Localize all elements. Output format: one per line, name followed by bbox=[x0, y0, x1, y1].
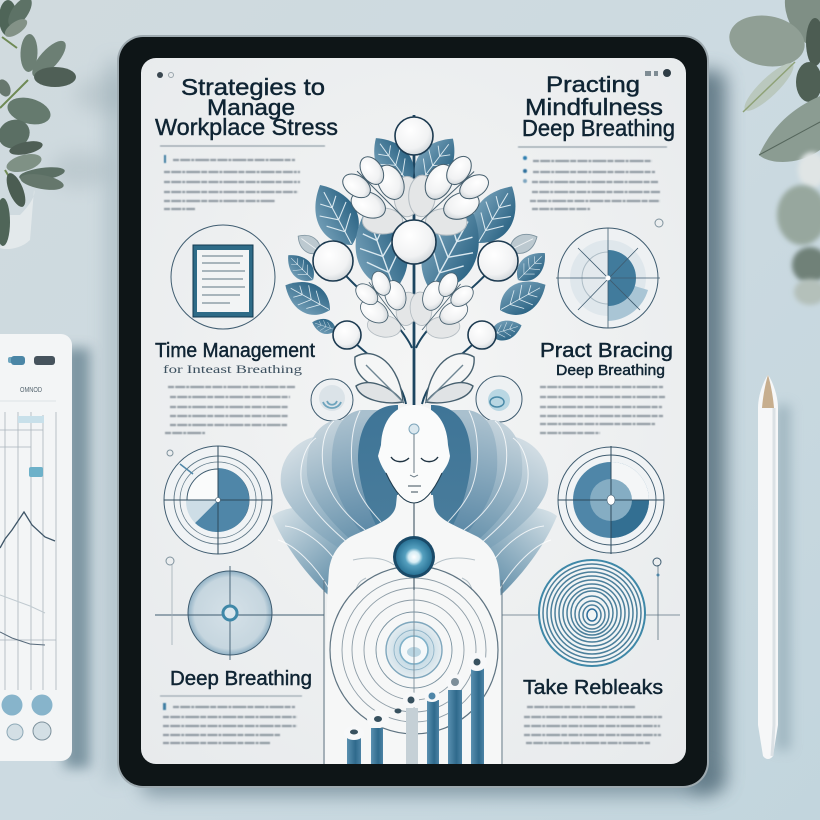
figure: body bbox=[324, 495, 503, 764]
branches bbox=[333, 115, 498, 405]
heading: time management bbox=[155, 340, 315, 376]
text block: mindfulness bbox=[518, 147, 667, 209]
figure: concentric rings bbox=[330, 566, 498, 734]
title: strategies: Manage bbox=[207, 95, 295, 120]
chart: time pie bbox=[164, 446, 272, 554]
heading: time management: for Inteast Breathing bbox=[163, 362, 302, 376]
icon: small circle left bbox=[311, 379, 353, 421]
title: mindfulness: Practing bbox=[546, 72, 640, 97]
status icons bbox=[157, 69, 671, 78]
stylus bbox=[758, 375, 790, 759]
title: strategies: Strategies to bbox=[181, 74, 325, 100]
heading: pract bracing bbox=[540, 340, 673, 379]
small side marks bbox=[166, 219, 663, 576]
tree illustration bbox=[278, 115, 553, 405]
top center caption bbox=[387, 87, 445, 89]
title: mindfulness: Deep Breathing bbox=[522, 115, 675, 141]
heading: take rebleaks: Take Rebleaks bbox=[523, 677, 663, 699]
spheres bbox=[313, 117, 518, 349]
heading: time management: Time Management bbox=[155, 340, 315, 362]
title: mindfulness: Mindfulness bbox=[525, 94, 663, 120]
plant: top left leaves bbox=[0, 0, 135, 249]
blue leaves bbox=[278, 128, 553, 344]
hair waves: left bbox=[272, 405, 398, 610]
side tablet with chart: OMNOD bbox=[20, 387, 42, 394]
heading: pract bracing: Deep Breathing bbox=[556, 362, 665, 379]
text block: pract bracing bbox=[540, 387, 665, 433]
icon: small circle right bbox=[476, 376, 522, 422]
text block: deep breathing bbox=[160, 696, 302, 743]
white leaves bbox=[323, 136, 508, 403]
tablet frame bbox=[106, 35, 726, 796]
figure: heart orb bbox=[393, 536, 435, 578]
chart: rising bars bbox=[344, 653, 487, 764]
title: mindfulness bbox=[522, 72, 675, 141]
chart: radial mindfulness bbox=[556, 228, 660, 328]
hair waves: right bbox=[431, 405, 557, 610]
text block: strategies bbox=[160, 146, 325, 209]
text block: time management bbox=[165, 387, 295, 433]
heading: deep breathing: Deep Breathing bbox=[170, 668, 312, 690]
plant: top right leaves bbox=[725, 0, 820, 305]
figure: head bbox=[378, 405, 450, 590]
text block: take rebleaks bbox=[524, 707, 662, 743]
icon: deep breathing disc bbox=[155, 565, 324, 660]
chart: breathing rings bbox=[558, 446, 664, 554]
icon: spiral rings bbox=[502, 560, 680, 666]
side tablet with chart bbox=[0, 334, 90, 768]
title: strategies bbox=[155, 74, 338, 140]
title: strategies: Workplace Stress bbox=[155, 114, 338, 140]
heading: pract bracing: Pract Bracing bbox=[540, 340, 673, 362]
icon: document in circle bbox=[171, 225, 275, 329]
chart grid bbox=[0, 412, 56, 690]
